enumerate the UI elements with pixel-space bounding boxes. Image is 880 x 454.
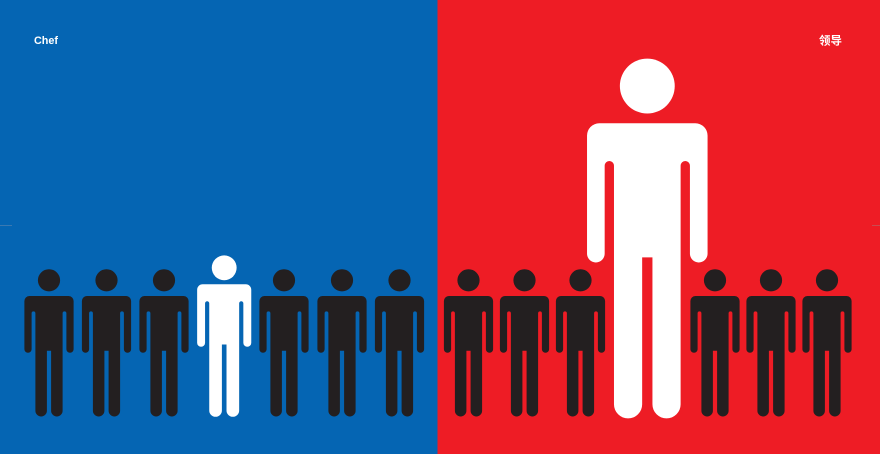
icon: black person 1 <box>444 269 493 416</box>
icon: black person 4 <box>259 269 309 416</box>
heading: Chef: Chef <box>34 35 58 47</box>
heading: 领导: 领导 <box>819 34 842 48</box>
panel background: blue <box>0 0 438 454</box>
icon: giant white person, the leader towering over the group <box>587 59 708 418</box>
icon: black person 3 <box>556 269 605 416</box>
panel background: red <box>438 0 880 454</box>
icon: black person 1 <box>24 269 74 416</box>
icon: black person 6 <box>802 269 852 416</box>
icon: white person, the chef among the group <box>197 255 251 417</box>
panel: blue Chef side <box>0 0 438 454</box>
icon: black person 2 <box>82 269 131 416</box>
icon: black person 3 <box>139 269 189 416</box>
icon: black person 6 <box>375 269 424 416</box>
panel: red 领导 side <box>438 0 880 454</box>
icon: black person 5 <box>746 269 796 416</box>
icon: black person 4 <box>690 269 740 416</box>
icon: black person 2 <box>500 269 549 416</box>
icon: black person 5 <box>317 269 367 416</box>
